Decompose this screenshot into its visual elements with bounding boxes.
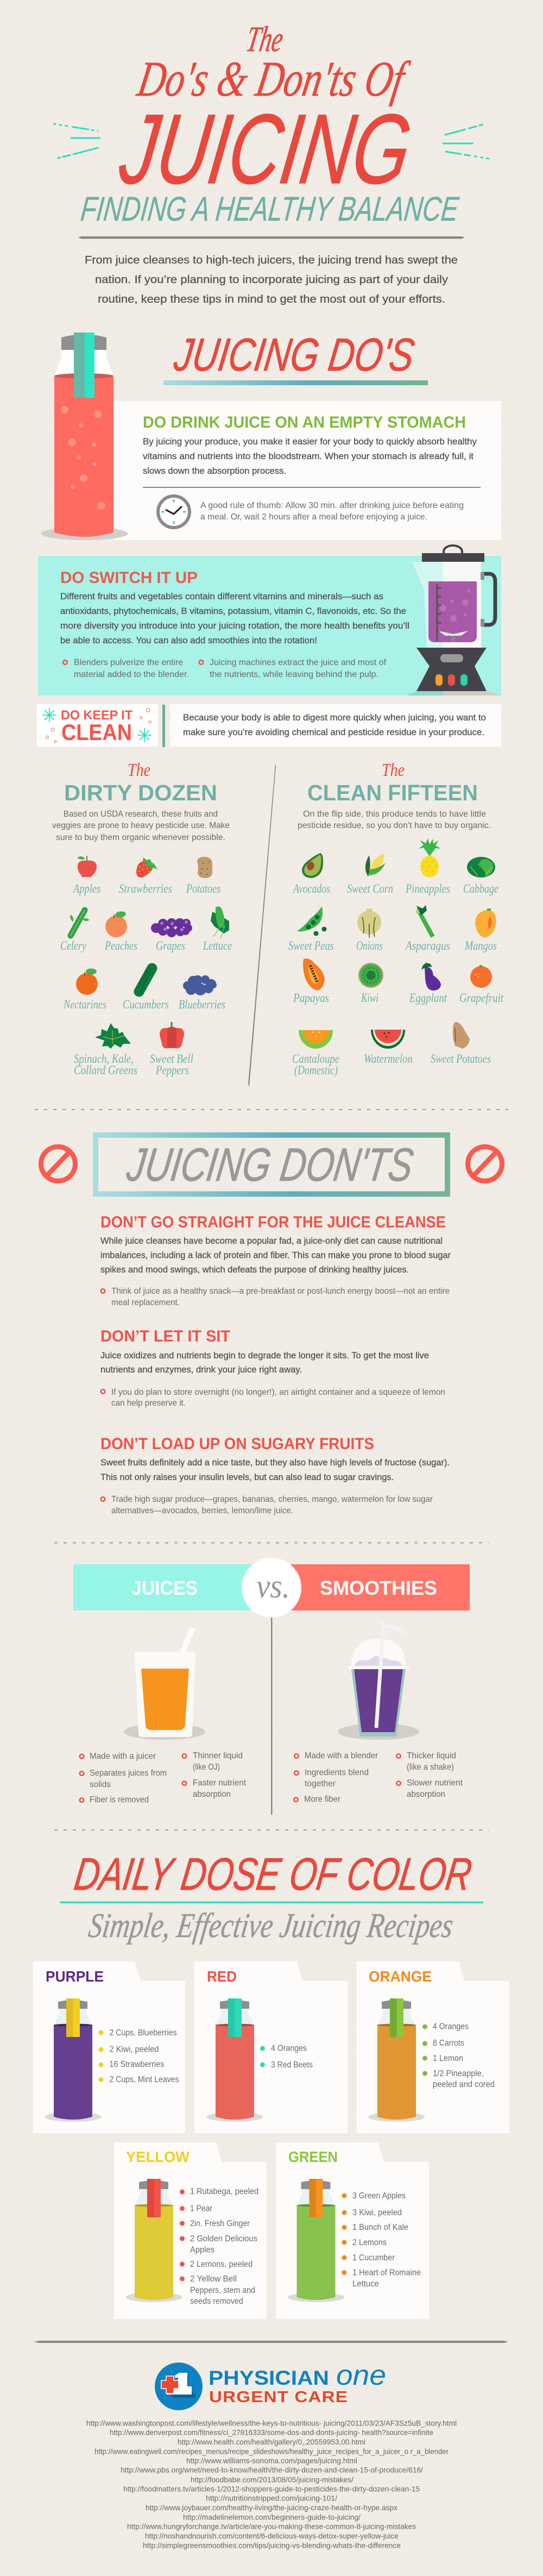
ingredients: seeds removed — [190, 2297, 243, 2306]
card title: YELLOW — [126, 2148, 190, 2165]
icon: nectarines — [76, 968, 98, 995]
bullet: can help preserve it. — [111, 1399, 186, 1408]
label: mangos: Mangos — [464, 939, 497, 952]
source links: http://nutritionstripped.com/juicing-101/ — [206, 2494, 337, 2503]
bullet: If you do plan to store overnight (no longer!), an airtight container and a squeeze of lemon — [111, 1388, 445, 1397]
list: smoothie facts column 1: together — [305, 1779, 336, 1789]
ingredients: 1 Pear — [190, 2204, 212, 2214]
heading: the dirty dozen: The — [128, 760, 150, 780]
icon: peaches — [105, 911, 127, 937]
list: smoothie facts column 1: Ingredients blend — [305, 1768, 369, 1777]
label: cucumbers: Cucumbers — [123, 998, 169, 1011]
icon: papayas — [303, 958, 325, 991]
source links: http://www.williams-sonoma.com/pages/juicing.html — [186, 2456, 357, 2465]
body text: more diversity you introduce into your juicing rotation, the more health benefits you’ll — [60, 621, 409, 631]
dirty dozen intro: veggies are prone to heavy pesticide use. Make — [52, 821, 230, 830]
icon: blender — [407, 546, 502, 695]
ingredients: 2 Cups, Mint Leaves — [110, 2075, 179, 2084]
panel: switch it up — [38, 556, 501, 695]
icon: eggplant — [421, 962, 441, 991]
bottle — [368, 1998, 425, 2122]
label: cantaloupe domestic: (Domestic) — [294, 1063, 338, 1077]
clean fifteen intro — [298, 810, 491, 830]
decorative sparks: right — [443, 124, 489, 159]
list: juice facts column 1: solids — [90, 1780, 111, 1789]
clean fifteen intro: pesticide residue, so you don’t have to buy organic. — [298, 821, 491, 830]
icon: sweet corn — [365, 854, 386, 877]
source links: http://www.washingtonpost.com/lifestyle/wellness/the-keys-to-nutritious- juicing/2011/03/23/AF3Sz5uB_story.html — [86, 2419, 457, 2428]
label: celery: Celery — [60, 939, 87, 952]
bottle — [126, 2179, 182, 2302]
label: sweet bell peppers: Sweet Bell — [150, 1052, 193, 1066]
body text — [100, 1350, 429, 1375]
list: juice facts column 1: Separates juices from — [90, 1769, 167, 1778]
list: juice facts column 2: (like OJ) — [193, 1763, 220, 1772]
heading: juice cleanse: DON’T GO STRAIGHT FOR THE JUICE CLEANSE — [100, 1213, 446, 1231]
card: red recipe — [194, 1961, 348, 2133]
body text: Sweet fruits definitely add a nice taste, but they also have high levels of fructose (sugar). — [100, 1457, 450, 1468]
ingredients: 8 Carrots — [433, 2039, 464, 2048]
bullet: blenders: Blenders pulverize the entire — [74, 658, 183, 667]
label: papayas: Papayas — [293, 991, 329, 1005]
bullet: juicing machines: the nutrients, while leaving behind the pulp. — [210, 670, 378, 679]
icon: spinach kale collards — [95, 1023, 131, 1049]
bullet — [101, 1388, 445, 1408]
label: cantaloupe domestic — [292, 1052, 339, 1077]
ingredients: 1 Lemon — [433, 2054, 463, 2063]
card title: PURPLE — [46, 1968, 104, 1985]
ingredients — [342, 2191, 421, 2289]
rule of thumb note — [200, 501, 464, 522]
badge text: DO KEEP IT — [61, 708, 132, 723]
heading: the clean fifteen: CLEAN FIFTEEN — [307, 780, 478, 805]
icon: grapes — [151, 918, 192, 937]
bullet — [182, 1754, 186, 1758]
body text — [100, 1457, 450, 1482]
list: smoothie facts column 1 — [294, 1751, 378, 1804]
dirty dozen intro: sure to buy them organic whenever possible. — [56, 833, 225, 842]
label: grapes: Grapes — [156, 939, 185, 952]
ingredients: 1 Heart of Romaine — [352, 2268, 421, 2278]
heading: the dirty dozen — [64, 760, 217, 805]
label: apples: Apples — [72, 882, 100, 895]
label: spinach kale collard greens: Spinach, Kale, — [74, 1052, 134, 1066]
ingredients: 2 Golden Delicious — [190, 2234, 257, 2243]
label: lettuce: Lettuce — [203, 939, 232, 952]
title — [79, 20, 461, 228]
banner: smoothies — [288, 1564, 470, 1610]
icon: watermelon — [371, 1030, 405, 1049]
intro paragraph: nation. If you’re planning to incorporate juicing as part of your daily — [95, 274, 448, 286]
heading: do switch it up: DO SWITCH IT UP — [60, 569, 198, 587]
bullet — [396, 1754, 401, 1758]
ingredients: 3 Green Apples — [352, 2191, 406, 2201]
icon: pineapples — [419, 838, 441, 878]
ingredients: 2 Yellow Bell — [190, 2274, 237, 2284]
ingredients: Lettuce — [352, 2279, 379, 2289]
label: cantaloupe domestic: Cantaloupe — [292, 1052, 339, 1066]
icon: sweet peas — [297, 906, 327, 936]
icon: sparkles — [42, 708, 151, 743]
card: yellow recipe — [114, 2142, 267, 2319]
dirty dozen intro: Based on USDA research, these fruits and — [64, 810, 218, 819]
heading: the clean fifteen: The — [382, 760, 405, 780]
label: potatoes: Potatoes — [186, 882, 220, 895]
logo: physician one urgent care — [155, 2360, 386, 2410]
label: blueberries: Blueberries — [179, 998, 225, 1011]
icon: strawberries — [136, 857, 157, 878]
heading: the clean fifteen — [307, 760, 478, 805]
icon: onions — [357, 908, 381, 938]
body text: spikes and mood swings, which defeats the purpose of drinking healthy juices. — [100, 1264, 409, 1275]
label: asparagus: Asparagus — [405, 939, 450, 952]
bullet: Think of juice as a healthy snack—a pre-breakfast or post-lunch energy boost—not an entire — [111, 1287, 450, 1296]
body text: vitamins and nutrients into the bloodstream. When your stomach is already full, it — [143, 451, 473, 461]
intro paragraph: From juice cleanses to high-tech juicers, the juicing trend has swept the — [85, 254, 458, 266]
ingredients — [422, 2022, 495, 2089]
logo: physician one urgent care: PHYSICIAN — [209, 2367, 329, 2389]
source links: http://noshandnourish.com/content/6-delicious-ways-detox-super-yellow-juice — [145, 2531, 399, 2540]
list: smoothie facts column 1: Made with a blender — [305, 1751, 378, 1760]
banner: smoothies: SMOOTHIES — [320, 1577, 437, 1599]
icon: large juice bottle — [41, 333, 128, 540]
label: sweet corn: Sweet Corn — [347, 882, 393, 895]
bottle — [288, 2179, 344, 2302]
body text: antioxidants, phytochemicals, B vitamins, potassium, vitamin C, flavonoids, etc. So the — [60, 606, 406, 616]
panel: keep it clean text — [170, 704, 501, 747]
ingredients — [180, 2187, 258, 2306]
heading: the dirty dozen: DIRTY DOZEN — [64, 780, 217, 805]
bottle — [206, 1998, 263, 2122]
source links: http://www.pbs.org/wnet/need-to-know/health/the-dirty-dozen-and-clean-15-of-produce/616/ — [121, 2466, 423, 2474]
icon: sweet bell peppers — [160, 1022, 184, 1049]
label: kiwi: Kiwi — [361, 991, 378, 1005]
badge text: CLEAN — [61, 719, 132, 745]
list: juice facts column 1: Made with a juicer — [90, 1752, 156, 1761]
section: don't load up on sugary fruits — [100, 1435, 450, 1515]
icon: smoothie cup — [338, 1624, 419, 1740]
icon: lettuce — [211, 906, 229, 939]
icon: celery — [70, 910, 90, 936]
ingredients: 1/2 Pineapple, — [433, 2069, 484, 2078]
label: watermelon: Watermelon — [364, 1052, 413, 1066]
list: smoothie facts column 2: Slower nutrient — [407, 1778, 463, 1788]
title: JUICING — [114, 93, 418, 204]
ingredients: 3 Kiwi, peeled — [352, 2208, 402, 2217]
bullet — [101, 1495, 433, 1515]
rule of thumb note: A good rule of thumb: Allow 30 min. after drinking juice before eating — [200, 501, 464, 510]
label: avocados: Avocados — [292, 882, 330, 895]
label: nectarines: Nectarines — [63, 998, 106, 1011]
ingredients: 4 Oranges — [271, 2044, 307, 2053]
subheading: recipes: Simple, Effective Juicing Recipes — [86, 1906, 456, 1945]
ingredients: Peppers, stem and — [190, 2286, 255, 2295]
ingredients: 2in. Fresh Ginger — [190, 2219, 250, 2228]
banner: juices: JUICES — [131, 1577, 198, 1599]
ingredients: 1 Rutabega, peeled — [190, 2187, 258, 2196]
list: smoothie facts column 2: absorption — [407, 1790, 445, 1799]
card: green recipe — [276, 2142, 429, 2319]
source links: http://www.health.com/health/gallery/0,,20559953,00.html — [178, 2437, 365, 2446]
logo: physician one urgent care: one — [336, 2360, 386, 2391]
icon: cabbage — [467, 857, 495, 878]
label: cabbage: Cabbage — [463, 882, 498, 895]
dirty dozen intro — [52, 810, 230, 842]
ingredients: 4 Oranges — [433, 2022, 469, 2031]
ingredients: 2 Kiwi, peeled — [110, 2045, 159, 2054]
bottle — [45, 1998, 101, 2122]
body text: be able to access. You can also add smoothies into the rotation! — [60, 635, 317, 645]
source links: http://www.eatingwell.com/recipes_menus/recipe_slideshows/healthy_juice_recipes_for_a_juicer_o r_a_blender — [94, 2447, 449, 2455]
bullet — [101, 1287, 450, 1307]
icon: prohibition left — [41, 1146, 75, 1181]
icon: kiwi — [358, 963, 383, 988]
label: peaches: Peaches — [104, 939, 137, 952]
label: sweet bell peppers — [150, 1052, 193, 1077]
bullet: Trade high sugar produce—grapes, bananas, cherries, mango, watermelon for low sugar — [111, 1495, 433, 1504]
panel: empty stomach — [113, 401, 501, 540]
icon: mangos — [475, 908, 496, 938]
label: spinach kale collard greens — [74, 1052, 137, 1077]
heading: sugary fruits: DON’T LOAD UP ON SUGARY FRUITS — [100, 1435, 374, 1453]
list: smoothie facts column 1: More fiber — [304, 1795, 341, 1804]
icon: avocados — [302, 853, 323, 878]
body text: imbalances, including a lack of protein and fiber. This can make you prone to blood sugar — [100, 1250, 451, 1261]
badge text — [61, 708, 132, 745]
panel: keep it clean text: Because your body is able to digest more quickly when juicing, you want to — [183, 712, 486, 723]
label: eggplant: Eggplant — [409, 991, 447, 1005]
section: don't go straight for the cleanse — [100, 1213, 451, 1307]
list: juice facts column 1: Fiber is removed — [90, 1795, 149, 1804]
card title: GREEN — [288, 2148, 338, 2165]
source links: http://www.hungryforchange.tv/article/are-you-making-these-common-8-juicing-mistakes — [127, 2522, 416, 2531]
icon: apples — [77, 856, 97, 877]
ingredients: 2 Lemons — [352, 2238, 387, 2247]
body text — [100, 1236, 451, 1275]
label: strawberries: Strawberries — [119, 882, 172, 895]
list: juice facts column 1 — [80, 1752, 167, 1804]
card title: RED — [207, 1968, 237, 1985]
clean fifteen intro: On the flip side, this produce tends to have little — [303, 810, 486, 819]
ingredients: 2 Cups, Blueberries — [110, 2028, 177, 2038]
ingredients: 16 Strawberries — [110, 2060, 165, 2069]
ingredients: 2 Lemons, peeled — [190, 2260, 252, 2269]
label: grapefruit: Grapefruit — [459, 991, 504, 1005]
logo mark — [155, 2362, 203, 2410]
body text: By juicing your produce, you make it easier for your body to quickly absorb healthy — [143, 436, 477, 447]
card: orange recipe — [357, 1961, 509, 2133]
label: sweet bell peppers: Peppers — [155, 1063, 189, 1077]
icon: sweet potatoes — [453, 1022, 470, 1049]
intro paragraph — [85, 254, 458, 305]
bullet: meal replacement. — [111, 1298, 180, 1307]
list: smoothie facts column 2: Thicker liquid — [407, 1751, 456, 1760]
body text — [60, 591, 409, 645]
icon: potatoes — [197, 857, 212, 878]
heading: let it sit: DON’T LET IT SIT — [100, 1327, 230, 1345]
ingredients: 1 Cucumber — [352, 2253, 395, 2262]
ingredients: 3 Red Beets — [271, 2060, 313, 2070]
panel: keep it clean text: make sure you’re avoiding chemical and pesticide residue in your produce. — [183, 727, 484, 737]
icon: clock — [158, 496, 190, 528]
banner: juices — [73, 1564, 255, 1610]
icon: asparagus — [416, 905, 433, 937]
list: juice facts column 2: absorption — [193, 1790, 231, 1799]
body text: nutrients and enzymes, drink your juice right away. — [100, 1364, 302, 1375]
body text: While juice cleanses have become a popular fad, a juice-only diet can cause nutritional — [100, 1236, 443, 1246]
versus badge — [242, 1558, 301, 1618]
bullet: blenders — [63, 658, 189, 679]
source links: http://foodmatters.tv/articles-1/2012-shoppers-guide-to-pesticides-the-dirty-dozen-clean-15 — [123, 2485, 420, 2493]
label: spinach kale collard greens: Collard Greens — [74, 1063, 137, 1077]
source links: http://foodbabe.com/2013/08/05/juicing-mistakes/ — [191, 2475, 353, 2484]
ingredients: Apples — [190, 2245, 214, 2255]
label: onions: Onions — [356, 939, 383, 952]
rule of thumb note: a meal. Or, wait 2 hours after a meal before enjoying a juice. — [200, 512, 427, 522]
label: sweet peas: Sweet Peas — [288, 939, 334, 952]
bullet: juicing machines: Juicing machines extract the juice and most of — [210, 658, 387, 667]
title: The — [243, 20, 286, 59]
source links — [86, 2419, 457, 2549]
versus badge: vs. — [256, 1568, 290, 1605]
heading frame: juicing don'ts: JUICING DON'TS — [124, 1139, 416, 1191]
body text — [143, 436, 477, 476]
heading: do drink juice: DO DRINK JUICE ON AN EMPTY STOMACH — [143, 413, 466, 431]
icon: cantaloupe — [299, 1030, 333, 1049]
body text: This not only raises your insulin levels, but can also lead to sugar cravings. — [100, 1472, 394, 1482]
decorative sparks: left — [54, 124, 100, 158]
source links: http://www.denverpost.com/fitness/ci_27816333/some-dos-and-donts-juicing- health?source=infinite — [110, 2428, 433, 2437]
body text: Juice oxidizes and nutrients begin to degrade the longer it sits. To get the most live — [100, 1350, 429, 1361]
bullet — [294, 1754, 299, 1758]
ingredients: peeled and cored — [433, 2080, 495, 2089]
intro paragraph: routine, keep these tips in mind to get the most out of your efforts. — [98, 293, 445, 305]
source links: http://madelinelemon.com/beginners-guide-to-juicing/ — [183, 2512, 361, 2521]
list: juice facts column 2: Thinner liquid — [193, 1751, 243, 1760]
heading: juicing do's: JUICING DO'S — [171, 329, 418, 381]
list: juice facts column 2 — [182, 1751, 247, 1799]
icon: blueberries — [183, 975, 217, 995]
ingredients — [260, 2044, 313, 2070]
bullet: blenders: material added to the blender. — [74, 670, 189, 679]
body text: Different fruits and vegetables contain different vitamins and minerals—such as — [60, 591, 383, 601]
card: purple recipe — [33, 1961, 185, 2133]
logo: physician one urgent care: URGENT CARE — [209, 2389, 348, 2406]
ingredients: 1 Bunch of Kale — [352, 2223, 408, 2232]
list: smoothie facts column 2: (like a shake) — [407, 1763, 454, 1772]
bullet: juicing machines — [199, 658, 387, 679]
bullet — [80, 1754, 84, 1758]
list: smoothie facts column 2 — [396, 1751, 463, 1799]
label: sweet potatoes: Sweet Potatoes — [431, 1052, 491, 1066]
title: Do's & Don'ts Of — [133, 52, 413, 107]
source links: http://simplegreensmoothies.com/tips/juicing-vs-blending-whats-the-difference — [143, 2541, 401, 2549]
label: pineapples: Pineapples — [405, 882, 450, 895]
icon: cucumbers — [138, 968, 152, 992]
icon: juice glass — [124, 1628, 205, 1740]
icon: prohibition right — [468, 1146, 502, 1181]
ingredients — [99, 2028, 179, 2084]
icon: grapefruit — [470, 965, 492, 988]
list: juice facts column 2: Faster nutrient — [193, 1778, 247, 1788]
body text: slows down the absorption process. — [143, 466, 286, 476]
panel: do keep it clean badge — [37, 704, 158, 747]
bullet: alternatives—avocados, berries, lemon/lime juice. — [111, 1506, 293, 1515]
source links: http://www.joybauer.com/healthy-living/the-juicing-craze-health-or-hype.aspx — [146, 2503, 397, 2512]
section: don't let it sit — [100, 1327, 445, 1408]
card title: ORANGE — [369, 1968, 432, 1985]
